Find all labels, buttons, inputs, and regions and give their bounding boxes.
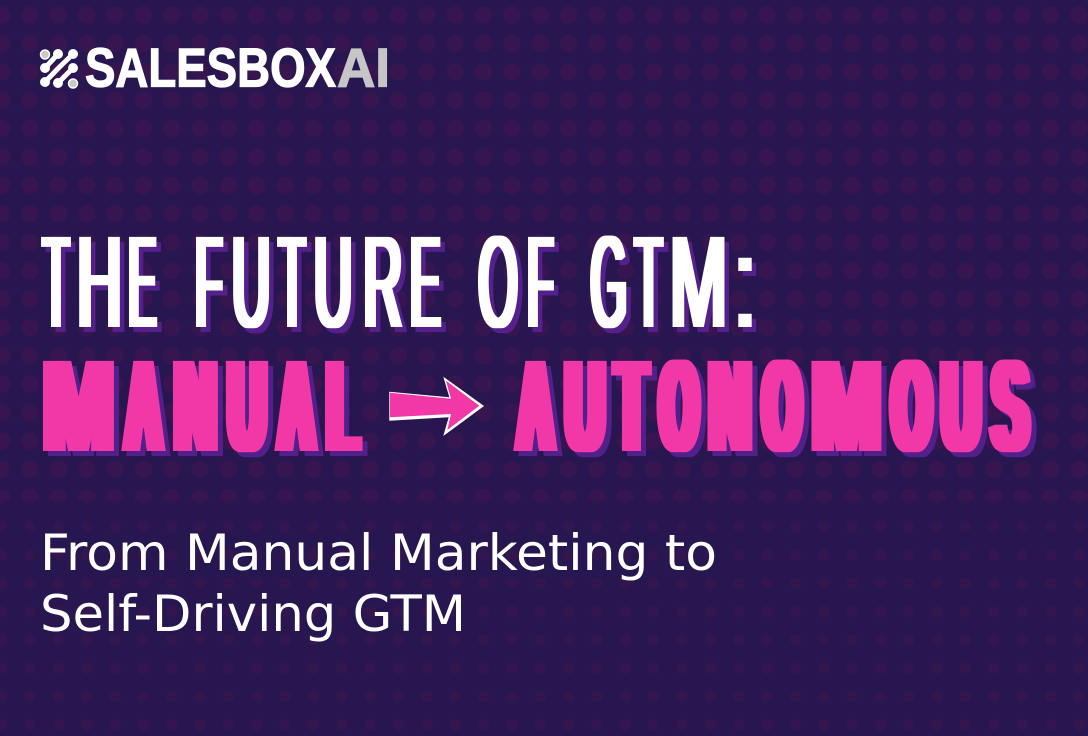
title word: autonomous: M xyxy=(812,332,881,479)
title word: manual: A xyxy=(279,332,314,479)
subtitle: Self-Driving GTM xyxy=(40,585,466,643)
title line 1: T xyxy=(43,208,69,355)
title line 1: G xyxy=(591,208,627,355)
title word: autonomous: T xyxy=(616,332,646,479)
logo wordmark: SALESBOX xyxy=(85,36,336,98)
title word: autonomous: U xyxy=(942,332,980,479)
logo xyxy=(40,36,390,98)
title line 1: : xyxy=(734,208,756,355)
title word: manual: N xyxy=(175,332,216,479)
title line 1: U xyxy=(314,208,352,355)
title word: autonomous: U xyxy=(566,332,604,479)
title line 1: R xyxy=(364,208,402,355)
icon: logo mark xyxy=(40,49,78,88)
arrow xyxy=(389,377,484,436)
infographic canvas: L xyxy=(328,332,358,479)
title line 1: F xyxy=(528,208,553,355)
title word: autonomous: O xyxy=(764,332,801,479)
title word: autonomous: N xyxy=(710,332,750,479)
subtitle: From Manual Marketing to xyxy=(40,524,717,582)
subtitle xyxy=(40,524,717,643)
title word: autonomous: O xyxy=(892,332,931,479)
title word: manual: U xyxy=(229,332,265,479)
title line 1: E xyxy=(410,208,440,355)
title word: manual: M xyxy=(43,332,114,479)
title line 1: T xyxy=(635,208,662,355)
title line 1: M xyxy=(670,208,727,355)
title line 1: U xyxy=(232,208,270,355)
title line 1: O xyxy=(479,208,518,355)
title line 1: E xyxy=(129,208,156,355)
title line 1: T xyxy=(279,208,305,355)
title line 1: F xyxy=(195,208,222,355)
infographic canvas: S xyxy=(992,332,1028,479)
logo AI: AI xyxy=(337,36,390,98)
title word: autonomous: O xyxy=(660,332,698,479)
title line 1: H xyxy=(77,208,122,355)
title word: manual: A xyxy=(126,332,161,479)
title word: autonomous: A xyxy=(518,332,553,479)
